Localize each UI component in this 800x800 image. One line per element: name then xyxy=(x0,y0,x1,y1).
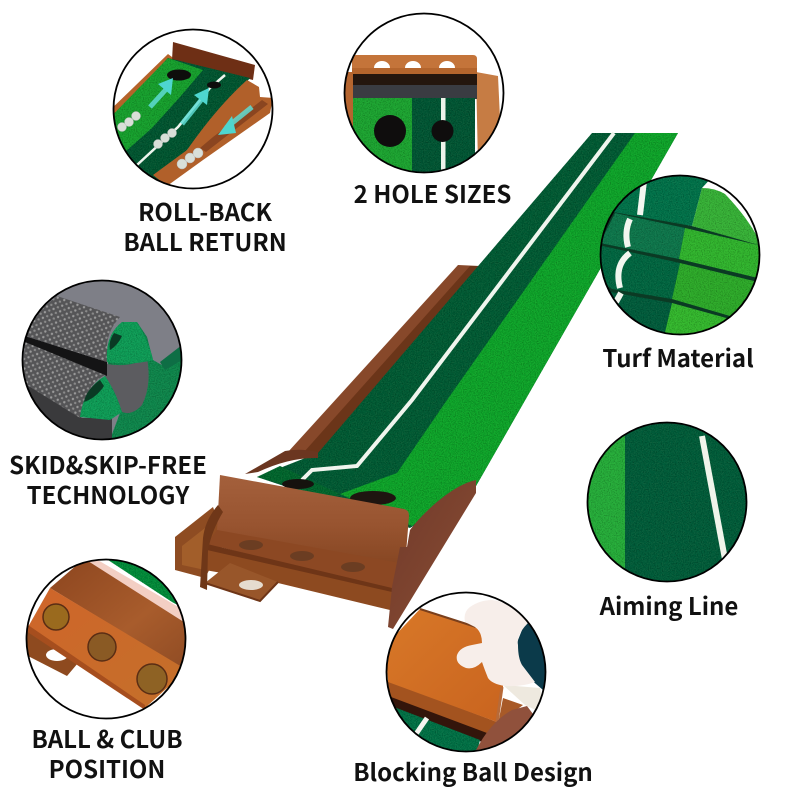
pale background right xyxy=(503,685,546,715)
club tab with hole xyxy=(205,563,278,601)
green turf base xyxy=(108,322,182,445)
label: skid and skip free technology xyxy=(9,446,207,511)
label: ball and club position: POSITION xyxy=(49,750,165,785)
rear-left base block xyxy=(175,507,225,578)
back board xyxy=(50,558,187,668)
label: ball and club position: BALL & CLUB xyxy=(31,720,183,755)
lower board face xyxy=(386,680,497,742)
right curved side xyxy=(388,480,476,629)
back board xyxy=(172,42,255,80)
row 1 xyxy=(614,176,708,226)
turf xyxy=(114,58,250,180)
sleeve xyxy=(516,620,548,690)
white aiming line on mat xyxy=(302,133,614,480)
hand xyxy=(457,600,535,686)
label: turf material: Turf Material xyxy=(602,339,754,374)
label: roll-back ball return: BALL RETURN xyxy=(123,223,287,258)
dark gap xyxy=(391,697,487,742)
holes xyxy=(167,70,191,80)
right wood rail xyxy=(476,72,500,150)
inner grey curl xyxy=(105,358,149,413)
green corner xyxy=(108,560,176,604)
photo circle: ball and club position xyxy=(26,558,187,719)
white aiming line xyxy=(702,436,727,570)
golf balls xyxy=(118,112,203,169)
turf xyxy=(394,707,480,756)
white line xyxy=(441,98,446,174)
label: ball and club position xyxy=(31,720,183,785)
label: skid and skip free technology: SKID&SKIP-FREE xyxy=(9,446,207,481)
curved wood side xyxy=(475,706,533,755)
product: putting mat with wooden hole box xyxy=(175,133,678,629)
row 2 xyxy=(600,213,685,259)
white aiming line pieces xyxy=(616,181,644,302)
label: aiming line: Aiming Line xyxy=(599,587,738,622)
green putting mat xyxy=(257,133,678,528)
ball shelf with three holes xyxy=(207,530,400,592)
brown strip behind xyxy=(498,698,523,724)
return ramp wood xyxy=(153,80,273,186)
shelf xyxy=(28,588,187,708)
row 3 xyxy=(598,245,680,299)
label: roll-back ball return: ROLL-BACK xyxy=(138,193,272,228)
photo circle: skid and skip free backing xyxy=(22,280,182,445)
photo circle: aiming line xyxy=(587,422,747,582)
left wooden rail xyxy=(288,265,480,455)
wood side strip xyxy=(114,54,172,113)
teal arrows xyxy=(150,85,252,128)
upper roll xyxy=(25,296,120,362)
left upright xyxy=(200,505,223,590)
green turf curl lower xyxy=(80,376,122,420)
left curved side piece xyxy=(245,450,318,474)
dark shadow between rolls xyxy=(25,336,107,376)
front board xyxy=(217,475,409,566)
tray with holes xyxy=(352,55,477,68)
label: blocking ball design: Blocking Ball Design xyxy=(353,753,593,788)
dark gap xyxy=(353,74,477,86)
label: 2 hole sizes: 2 HOLE SIZES xyxy=(354,175,511,210)
pale strip xyxy=(90,560,182,622)
photo circle: roll-back ball return xyxy=(112,28,274,190)
photo circle: blocking ball design xyxy=(386,592,548,756)
photo circle: turf material xyxy=(600,174,760,336)
row 4 xyxy=(611,292,672,332)
photo circle: two hole sizes xyxy=(344,13,504,178)
left wood strip xyxy=(345,72,353,126)
white line xyxy=(137,75,225,165)
base front wood xyxy=(205,545,400,610)
holes xyxy=(43,604,167,694)
green turf curl upper xyxy=(107,322,153,364)
label: skid and skip free technology: TECHNOLOGY xyxy=(27,476,190,511)
shadow base under folds xyxy=(602,212,758,333)
club tab xyxy=(26,630,78,676)
cup holes xyxy=(282,479,396,505)
holes xyxy=(374,115,406,147)
white line stub xyxy=(416,718,427,734)
label: roll-back ball return xyxy=(123,193,287,258)
lower roll xyxy=(22,342,105,418)
upright board xyxy=(386,609,503,722)
turf panels xyxy=(353,98,475,178)
